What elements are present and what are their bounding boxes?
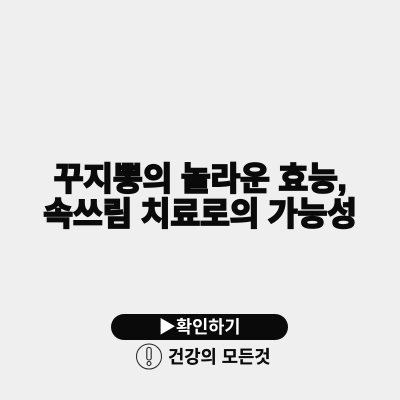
icon: exclamation in circle — [136, 344, 162, 370]
site credit — [136, 344, 271, 370]
title — [43, 161, 357, 232]
button: confirm — [111, 314, 288, 340]
button label: ▶확인하기 — [159, 317, 240, 337]
title: 꾸지뽕의 놀라운 효능, — [54, 161, 346, 197]
title: 속쓰림 치료로의 가능성 — [43, 196, 357, 232]
site name: 건강의 모든것 — [168, 347, 271, 367]
